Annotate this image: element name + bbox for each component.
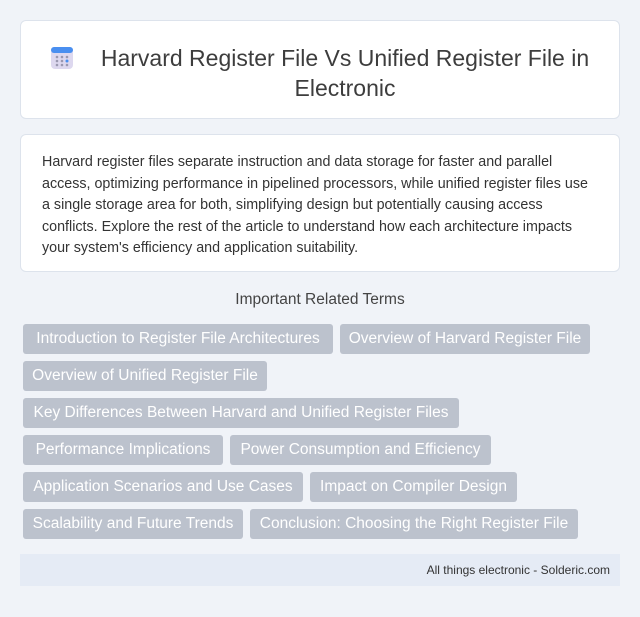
related terms tags: Key Differences Between Harvard and Unified Register Files — [34, 404, 448, 421]
related terms tags: Conclusion: Choosing the Right Register File — [260, 515, 568, 532]
related terms tags — [23, 324, 590, 539]
related terms tags: Impact on Compiler Design — [320, 478, 507, 495]
related terms tags: Overview of Harvard Register File — [349, 330, 581, 347]
section heading: Important Related Terms — [235, 291, 405, 308]
related terms tags: Overview of Unified Register File — [32, 367, 258, 384]
description card — [20, 134, 620, 272]
footer: All things electronic - Solderic.com — [427, 563, 610, 577]
related terms tags: Introduction to Register File Architectures — [36, 330, 320, 347]
related terms tags: Application Scenarios and Use Cases — [33, 478, 293, 495]
header card — [20, 20, 620, 119]
related terms tags: Scalability and Future Trends — [33, 515, 233, 532]
related terms tags: Power Consumption and Efficiency — [240, 441, 481, 458]
description text: Harvard register files separate instruction and data storage for faster and parallel access, optimizing performance in pipelined processors, while unified register files use a single storage area for both, simplifying design but potentially causing access conflicts. Explore the rest of the article to understand how each architecture impacts your system's efficiency and application suitability. — [42, 154, 588, 256]
title: Harvard Register File Vs Unified Register File in Electronic — [101, 45, 589, 101]
footer — [20, 554, 620, 586]
icon: calendar — [51, 47, 73, 69]
related terms tags: Performance Implications — [36, 441, 210, 458]
